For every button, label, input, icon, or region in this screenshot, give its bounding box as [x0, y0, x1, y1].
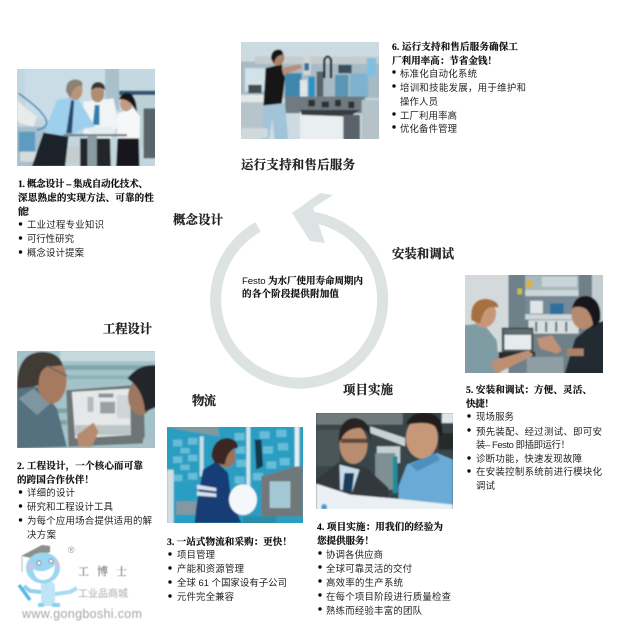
photo 5: two men at control cabinet [465, 275, 603, 373]
text block 2: engineering [17, 460, 152, 540]
photo 2: engineers at monitor [17, 351, 155, 448]
text block 3: logistics: 产能和资源管理 [177, 563, 245, 574]
text block 1: concept design: 深思熟虑的实现方法、可靠的性 [18, 192, 154, 204]
text block 6: operation support: 培训和技能发展，用于维护和 [400, 82, 526, 93]
text block 4: project implementation: 协调各供应商 [326, 549, 383, 560]
text block 5: installation: 诊断功能，快速发现故障 [476, 453, 582, 464]
text block 1: concept design: 工业过程专业知识 [27, 219, 104, 230]
text block 6: operation support: 6. 运行支持和售后服务确保工 [392, 41, 518, 53]
heading: engineering design: 工程设计 [103, 321, 153, 336]
heading: logistics: 物流 [192, 393, 217, 408]
center text: Festo 为水厂使用寿命周期内 [242, 275, 363, 287]
heading: project implementation: 项目实施 [343, 382, 394, 397]
text block 6: operation support: 厂利用率高：节省金钱！ [392, 55, 497, 67]
text block 2: engineering: 研究和工程设计工具 [27, 501, 113, 512]
text block 6: operation support: 优化备件管理 [400, 123, 458, 134]
text block 3: logistics: 元件完全兼容 [177, 591, 234, 602]
brand name: 工博士 [78, 564, 127, 578]
text block 4: project implementation: 在每个项目阶段进行质量检查 [326, 591, 452, 602]
watermark: Gongboshi logo [19, 545, 142, 621]
heading: installation and commissioning: 安装和调试 [392, 246, 455, 261]
text block 5: installation: 现场服务 [476, 411, 514, 422]
text block 3: logistics: 3. 一站式物流和采购：更快！ [167, 536, 292, 548]
text block 4: project implementation: 熟练而经验丰富的团队 [326, 605, 423, 616]
text block 2: engineering: 决方案 [27, 529, 57, 540]
text block 1: concept design [18, 178, 154, 258]
text block 6: operation support: 标准化自动化系统 [400, 68, 477, 79]
text block 6: operation support: 工厂利用率高 [400, 110, 457, 121]
text block 3: logistics: 项目管理 [177, 549, 216, 560]
text block 2: engineering: 详细的设计 [27, 487, 75, 498]
photo 3: warehouse worker [167, 427, 303, 523]
text block 4: project implementation [317, 521, 452, 616]
text block 5: installation: 调试 [476, 480, 496, 491]
brand subtitle: 工业品商城 [78, 587, 128, 600]
center text: 的各个阶段提供附加值 [242, 288, 339, 300]
cycle arrow ring [216, 193, 383, 383]
text block 1: concept design: 能！ [18, 206, 35, 218]
text block 3: logistics: 全球 61 个国家设有子公司 [177, 577, 287, 588]
text block 4: project implementation: 4. 项目实施：用我们的经验为 [317, 521, 443, 533]
text block 5: installation: 预先装配、经过测试、即可安 [476, 426, 602, 437]
text block 5: installation: 装– Festo 即插即运行！ [476, 439, 570, 450]
heading: operation and after-sales service: 运行支持和售后服务 [241, 157, 356, 172]
text block 1: concept design: 1. 概念设计 – 集成自动化技术、 [18, 178, 148, 190]
text block 5: installation: 5. 安装和调试：方便、灵活、 [466, 384, 592, 396]
text block 4: project implementation: 全球可靠灵活的交付 [326, 563, 412, 574]
text block 6: operation support [392, 41, 526, 134]
registered mark: ® [68, 545, 75, 555]
text block 1: concept design: 概念设计提案 [27, 247, 85, 258]
icon: mascot [19, 545, 77, 606]
text block 6: operation support: 操作人员 [400, 96, 438, 107]
photo 6: operator at machine [241, 42, 379, 139]
text block 4: project implementation: 高效率的生产系统 [326, 577, 403, 588]
heading: concept design: 概念设计 [173, 212, 224, 227]
photo 4: two men reading a plan [316, 413, 453, 509]
text block 2: engineering: 为每个应用场合提供适用的解 [27, 515, 152, 526]
text block 3: logistics [167, 536, 292, 602]
text block 5: installation: 在安装控制系统前进行模块化 [476, 466, 602, 477]
center text [242, 275, 363, 300]
text block 2: engineering: 2. 工程设计，一个核心而可靠 [17, 460, 143, 472]
text block 5: installation [466, 384, 602, 491]
photo 1: team at table [17, 69, 155, 166]
text block 1: concept design: 可行性研究 [27, 233, 74, 244]
text block 2: engineering: 的跨国合作伙伴！ [17, 474, 94, 486]
text block 5: installation: 快捷！ [466, 398, 494, 410]
website: www.gongboshi.com [21, 607, 142, 621]
text block 4: project implementation: 您提供服务！ [317, 535, 374, 547]
